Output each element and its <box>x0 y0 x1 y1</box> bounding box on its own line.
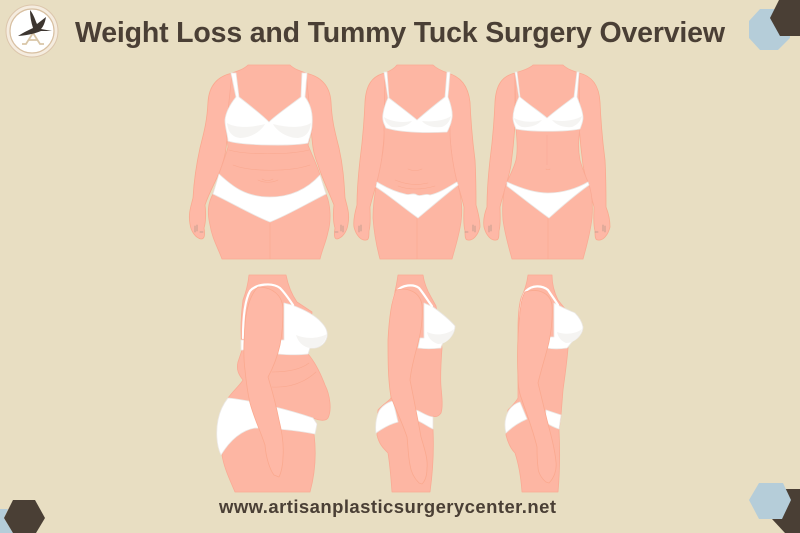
bra <box>225 73 312 145</box>
body <box>506 275 568 492</box>
torso and legs <box>208 65 330 259</box>
right arm <box>447 73 480 240</box>
left arm <box>189 73 236 239</box>
bra <box>418 303 455 349</box>
figure: front view before surgery <box>189 65 349 259</box>
fingers <box>195 225 343 232</box>
arm <box>388 289 427 484</box>
bra <box>278 303 327 355</box>
body <box>377 275 442 492</box>
figure: side view before surgery <box>217 275 330 492</box>
torso and legs <box>503 65 592 259</box>
arm <box>518 291 556 483</box>
right arm <box>579 73 610 240</box>
underwear <box>416 410 433 429</box>
decoration: top right hexagons <box>749 0 800 50</box>
decoration: bottom right hexagons <box>749 483 800 533</box>
underwear <box>213 174 326 222</box>
torso and legs <box>373 65 462 259</box>
figure: front view after weight loss <box>354 65 480 259</box>
bra <box>547 303 583 349</box>
underwear <box>545 410 561 429</box>
title: Weight Loss and Tummy Tuck Surgery Overview <box>75 17 726 49</box>
fingers <box>489 225 605 232</box>
bra <box>383 72 452 133</box>
figure: side view after weight loss <box>376 275 455 492</box>
underwear with skin fold <box>376 182 458 218</box>
figure: front view after tummy tuck <box>484 65 610 259</box>
arm <box>244 287 283 477</box>
website url: www.artisanplasticsurgerycenter.net <box>218 496 556 517</box>
underwear <box>507 182 589 218</box>
left arm <box>354 73 385 240</box>
logo: Artisan crane emblem <box>6 5 58 57</box>
bra <box>513 72 583 131</box>
body <box>222 275 330 492</box>
decoration: bottom left hexagons <box>0 500 45 533</box>
right arm <box>302 73 349 239</box>
underwear <box>217 398 317 455</box>
left arm <box>484 73 515 240</box>
fingers <box>359 225 475 232</box>
figure: side view after tummy tuck <box>505 275 583 492</box>
